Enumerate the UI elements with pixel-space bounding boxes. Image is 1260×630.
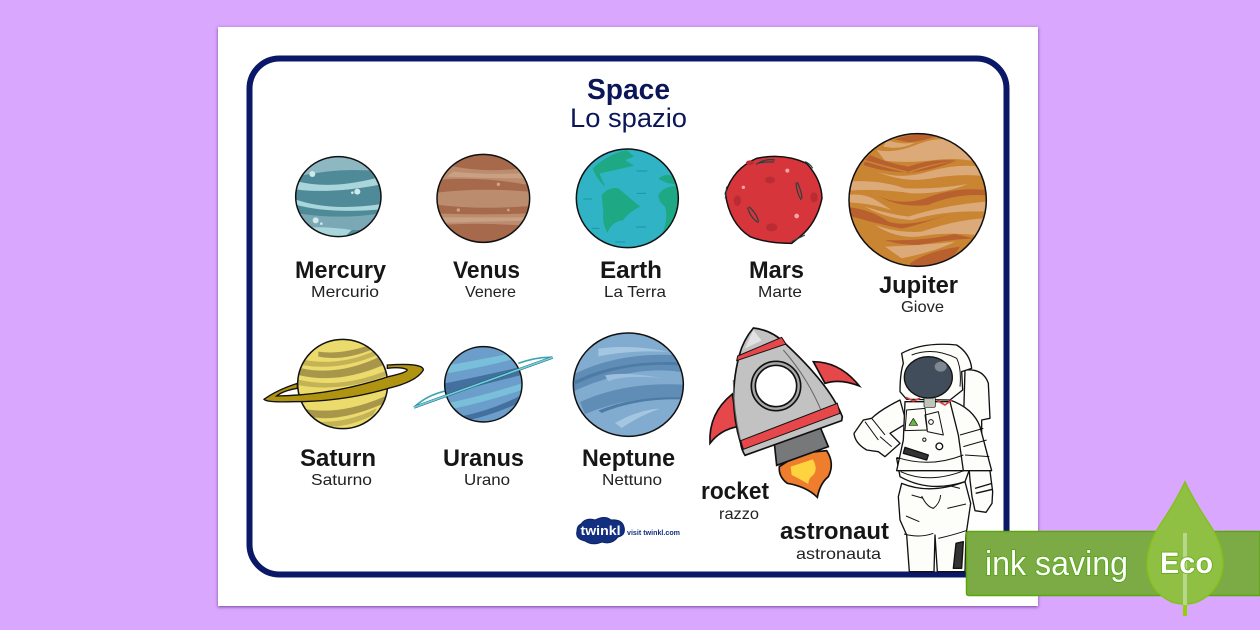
planet: Saturn xyxy=(264,338,423,430)
navy rounded frame xyxy=(250,58,1006,574)
planet labels: Urano xyxy=(464,472,510,489)
planet labels: Saturno xyxy=(311,472,372,489)
planet: Venus xyxy=(435,153,532,243)
chest controls xyxy=(909,418,918,425)
title: Space xyxy=(587,74,670,106)
planet: Uranus xyxy=(414,345,553,423)
astronaut upper body xyxy=(854,344,992,471)
astronaut xyxy=(854,344,993,572)
planet: Jupiter xyxy=(847,132,988,268)
planet: Earth xyxy=(573,147,682,250)
planet labels xyxy=(295,257,958,489)
Uranus ring xyxy=(414,357,553,407)
planet labels: Earth xyxy=(600,257,662,284)
rocket flame core xyxy=(791,459,816,484)
Saturn ring xyxy=(264,364,423,402)
astronaut helmet xyxy=(900,344,972,400)
Eco text: Eco xyxy=(1160,547,1213,580)
planet labels: Marte xyxy=(758,284,802,301)
planet labels: Mercury xyxy=(295,257,387,284)
planet labels: Venere xyxy=(465,284,516,301)
leaf drop icon xyxy=(1147,482,1223,616)
planet labels: Mercurio xyxy=(311,284,379,301)
ink saving text: ink saving xyxy=(985,545,1128,583)
rocket window xyxy=(751,361,801,411)
rocket xyxy=(710,328,859,497)
rocket fins xyxy=(710,362,859,443)
planet labels: Mars xyxy=(749,257,804,284)
astronaut label: astronauta xyxy=(796,546,881,563)
rocket body xyxy=(734,328,842,455)
title: Lo spazio xyxy=(570,103,687,133)
rocket nozzle xyxy=(774,427,828,465)
planet labels: Nettuno xyxy=(602,472,662,489)
twinkl logo: twinkl xyxy=(580,523,620,538)
title xyxy=(570,74,687,133)
astronaut label: astronaut xyxy=(780,518,889,545)
twinkl logo xyxy=(577,518,680,544)
planet labels: Neptune xyxy=(582,445,675,472)
worksheet page xyxy=(218,27,1038,606)
rocket label xyxy=(701,478,769,523)
planet labels: Venus xyxy=(453,257,520,284)
rocket label: rocket xyxy=(701,478,769,505)
ink saving banner xyxy=(966,482,1260,616)
planet: Neptune xyxy=(572,331,685,438)
planet labels: La Terra xyxy=(604,284,666,301)
rocket flame xyxy=(779,451,831,497)
planet labels: Uranus xyxy=(443,445,524,472)
planet labels: Giove xyxy=(901,299,944,316)
twinkl logo: visit twinkl.com xyxy=(627,528,680,537)
planet labels: Jupiter xyxy=(879,272,958,299)
rocket label: razzo xyxy=(719,506,759,523)
astronaut lower body xyxy=(897,458,993,572)
astronaut label xyxy=(780,518,889,563)
planet: Mercury xyxy=(293,153,383,240)
planet labels: Saturn xyxy=(300,445,376,472)
planet: Mars xyxy=(725,156,822,243)
